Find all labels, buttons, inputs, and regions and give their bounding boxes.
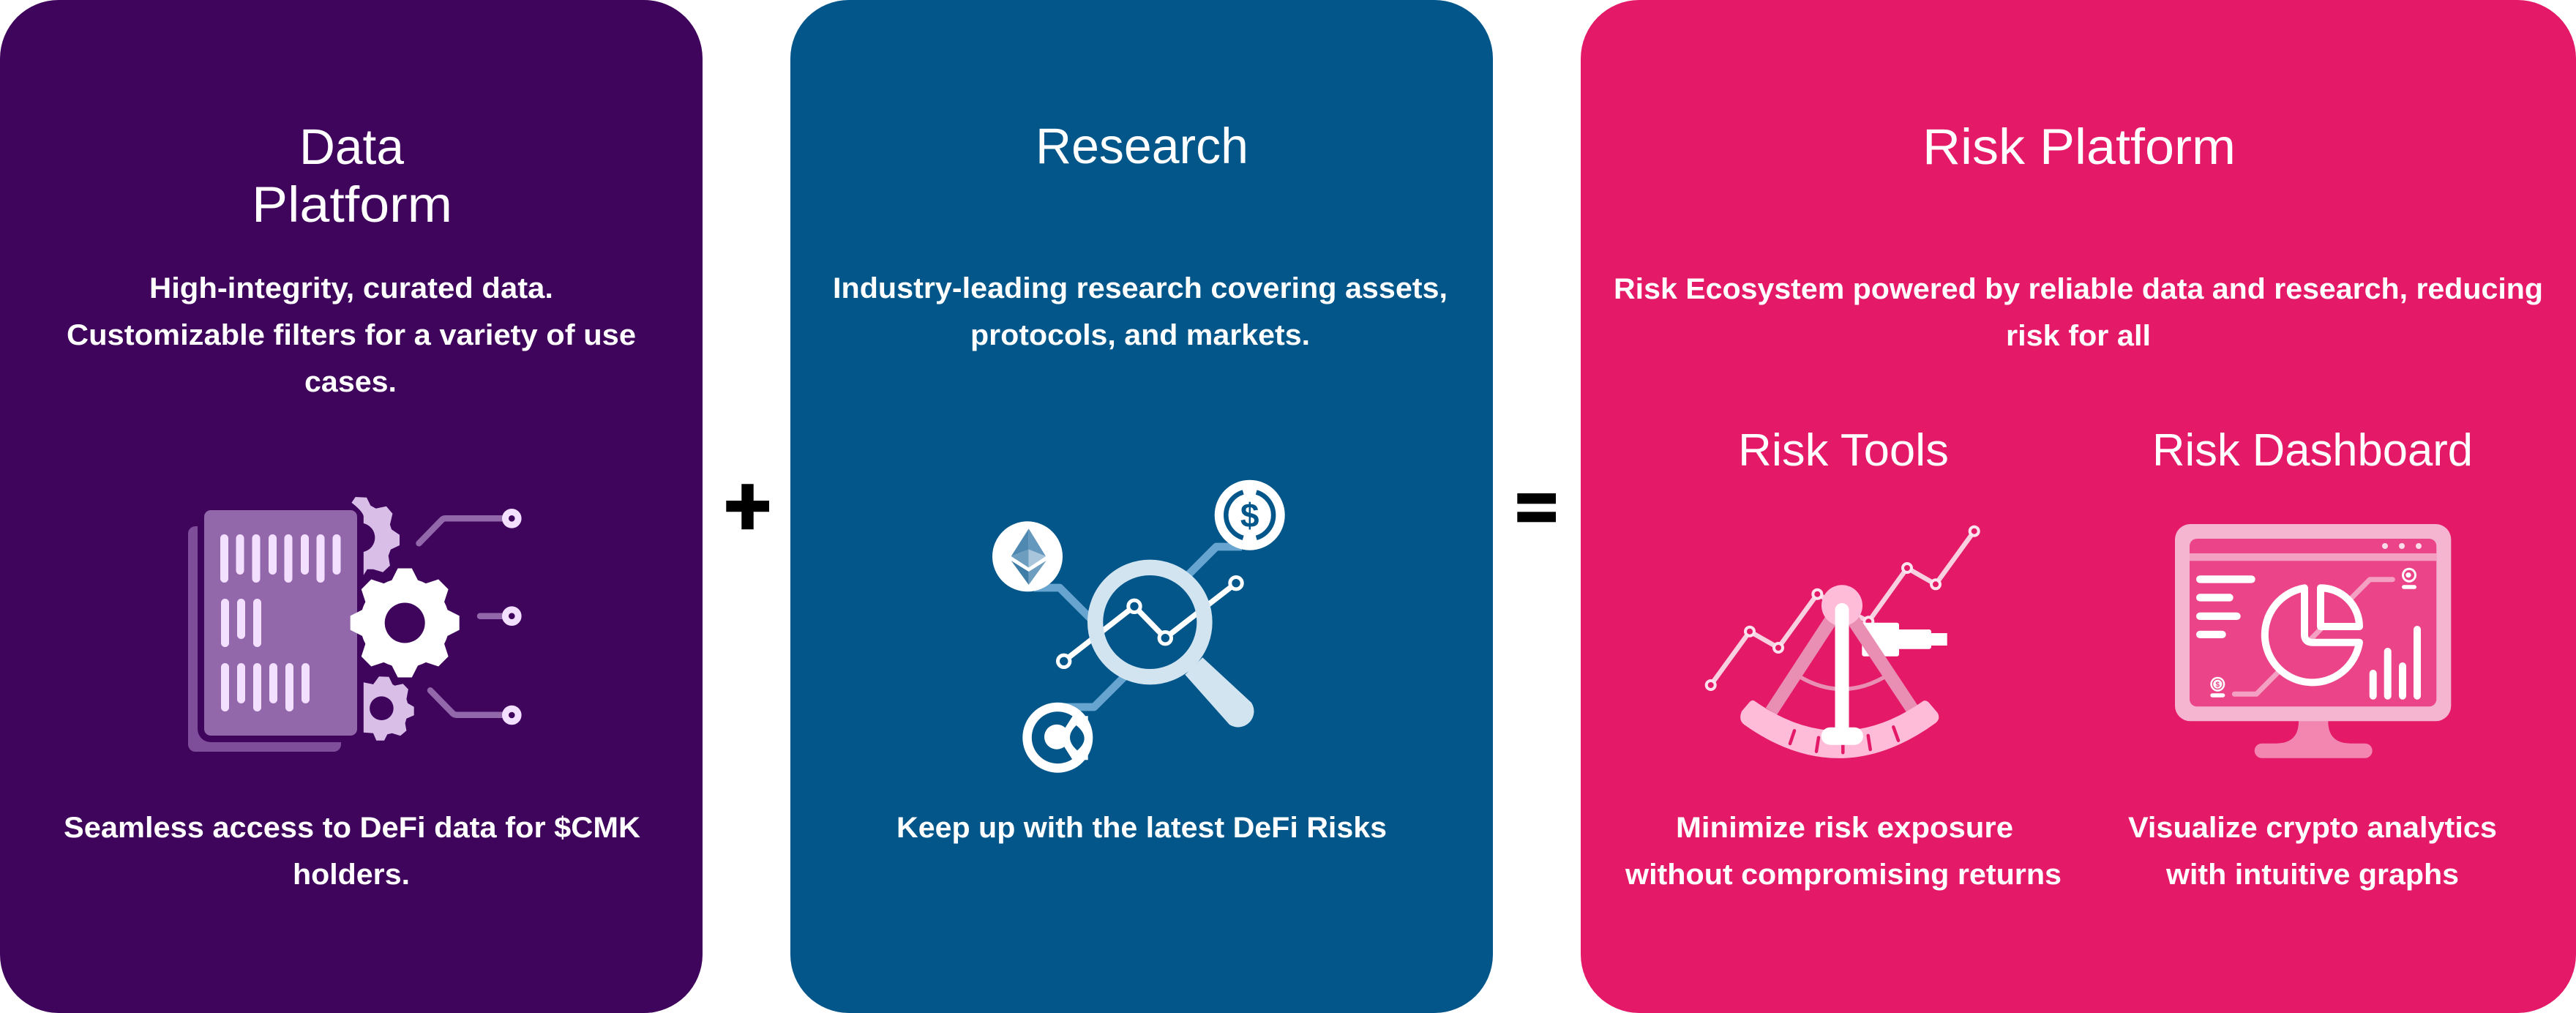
title bar band bbox=[2190, 553, 2436, 561]
graduated arc bbox=[1740, 700, 1939, 758]
trend line bbox=[1064, 583, 1236, 661]
sextant pivot bbox=[1821, 585, 1862, 626]
lower gear bbox=[364, 676, 414, 741]
bar chart bbox=[2370, 626, 2421, 700]
text: risk description: risk for all bbox=[2006, 320, 2151, 352]
panel background bbox=[1581, 0, 2576, 1013]
text: risk description bbox=[1614, 273, 2543, 352]
index arm bbox=[1821, 603, 1863, 745]
text: risk tools note: Minimize risk exposure bbox=[1676, 812, 2013, 844]
monitor stand bbox=[2255, 717, 2373, 758]
circuit traces bbox=[419, 518, 512, 715]
text: data access: Seamless access to DeFi data for $CMK bbox=[64, 812, 640, 844]
text: data description: cases. bbox=[304, 366, 397, 398]
rising chart line bbox=[1711, 531, 1974, 685]
icon: magnifier with crypto tokens bbox=[992, 480, 1285, 773]
mini token: usdc: $ bbox=[2216, 681, 2220, 689]
heading: data platform: Data bbox=[299, 119, 405, 175]
panel: data platform bbox=[0, 0, 703, 1013]
screen bbox=[2190, 539, 2436, 706]
pie chart bbox=[2265, 588, 2359, 682]
text: risk tools note: without compromising returns bbox=[1625, 859, 2062, 891]
main gear bbox=[351, 568, 460, 678]
text: risk tools note bbox=[1625, 812, 2062, 891]
monitor frame bbox=[2175, 524, 2451, 721]
panel: research bbox=[790, 0, 1493, 1013]
heading: data platform: Platform bbox=[252, 176, 452, 233]
token: cream bbox=[1022, 703, 1093, 773]
arc ticks bbox=[1790, 727, 1898, 752]
panel background bbox=[790, 0, 1493, 1013]
icon: data sheets and gears bbox=[188, 497, 518, 752]
text: data description: High-integrity, curated data. bbox=[149, 272, 553, 304]
connector trace bbox=[2234, 580, 2392, 694]
panel: risk platform bbox=[1581, 0, 2576, 1013]
data bars bbox=[220, 534, 341, 711]
heading: research: Research bbox=[1036, 118, 1248, 174]
chart nodes bbox=[1707, 527, 1979, 689]
text: risk dashboard note: with intuitive graphs bbox=[2165, 859, 2459, 891]
front sheet bbox=[204, 510, 357, 736]
text: research description: Industry-leading research covering assets, bbox=[833, 272, 1448, 304]
panel background bbox=[0, 0, 703, 1013]
trend nodes bbox=[1058, 577, 1242, 668]
text: data access bbox=[64, 812, 640, 891]
text: data access: holders. bbox=[293, 859, 410, 891]
subheading: risk dashboard: Risk Dashboard bbox=[2152, 425, 2473, 476]
text: research description: protocols, and markets. bbox=[970, 319, 1310, 351]
token: ethereum bbox=[992, 521, 1063, 591]
subheading: risk tools: Risk Tools bbox=[1738, 425, 1949, 476]
telescope bbox=[1862, 623, 1947, 657]
heading: risk platform: Risk Platform bbox=[1922, 119, 2236, 175]
icon: sextant over chart bbox=[1707, 527, 1979, 758]
connector traces bbox=[1034, 547, 1242, 707]
magnifier bbox=[1096, 567, 1254, 727]
mini token: cream bbox=[2402, 568, 2416, 589]
text lines bbox=[2196, 575, 2255, 638]
upper gear bbox=[351, 497, 400, 575]
text: risk description: Risk Ecosystem powered by reliable data and research, reducing bbox=[1614, 273, 2543, 305]
plus sign bbox=[726, 484, 769, 529]
circuit nodes bbox=[505, 512, 518, 722]
back sheet bbox=[188, 526, 341, 752]
text: data description bbox=[67, 272, 636, 398]
text: research note: Keep up with the latest DeFi Risks bbox=[896, 812, 1387, 844]
heading: data platform bbox=[252, 119, 452, 233]
text: risk dashboard note: Visualize crypto analytics bbox=[2128, 812, 2497, 844]
token: usdc: $ bbox=[1240, 496, 1259, 534]
sextant frame bbox=[1771, 603, 1912, 711]
equals sign bbox=[1517, 493, 1556, 522]
text: research description bbox=[833, 272, 1448, 351]
icon: dashboard monitor bbox=[2175, 524, 2451, 758]
mini token: usdc bbox=[2210, 677, 2225, 698]
window dots bbox=[2382, 543, 2422, 549]
text: data description: Customizable filters for a variety of use bbox=[67, 319, 636, 351]
text: risk dashboard note bbox=[2128, 812, 2497, 891]
token: usdc bbox=[1215, 480, 1285, 550]
